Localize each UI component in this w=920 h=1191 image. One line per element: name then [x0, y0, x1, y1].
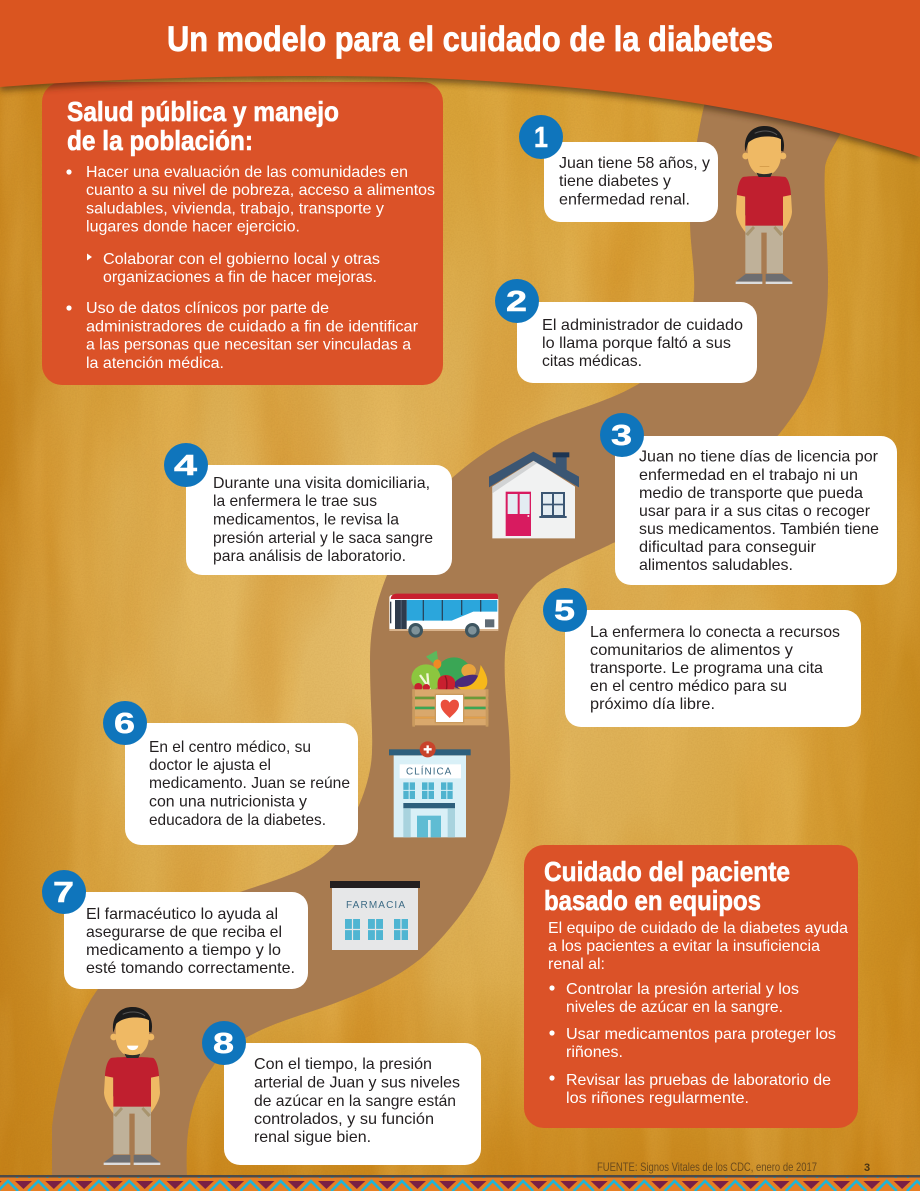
step 4 callout: 4	[174, 450, 197, 482]
figure: Juan, neutral expression	[736, 126, 792, 284]
sub-bullet: local government: Colaborar con el gobierno local y otras	[103, 251, 380, 268]
panel: Cuidado del paciente basado en equipos	[524, 845, 858, 1128]
bullet: blood pressure and sugar	[549, 981, 799, 1016]
source note: FUENTE: Signos Vitales de los CDC, enero de 2017	[597, 1160, 817, 1174]
step 2 callout	[495, 279, 757, 383]
title banner	[0, 0, 920, 161]
icon: pharmacy	[330, 881, 420, 950]
step 8 callout: de azúcar en la sangre están	[254, 1093, 456, 1110]
step 4 callout: presión arterial y le saca sangre	[213, 530, 433, 547]
step 7 callout: esté tomando correctamente.	[86, 960, 295, 977]
step 1 callout	[519, 115, 718, 222]
step 6 callout: medicamento. Juan se reúne	[149, 775, 350, 792]
bullet: community evaluation: Hacer una evaluación de las comunidades en	[86, 164, 408, 181]
bullet: blood pressure and sugar: Controlar la presión arterial y los	[566, 981, 799, 998]
bullet: community evaluation: saludables, vivienda, trabajo, transporte y	[86, 200, 384, 218]
panel: Salud pública y manejo de la población	[42, 82, 443, 385]
intro text: El equipo de cuidado de la diabetes ayuda	[548, 920, 848, 937]
bullet: lab tests	[549, 1072, 831, 1107]
step 7 callout: asegurarse de que reciba el	[86, 924, 282, 941]
step 7 callout: El farmacéutico lo ayuda al	[86, 906, 278, 923]
bullet: clinical data: Uso de datos clínicos por parte de	[86, 300, 329, 317]
step 5 callout: 5	[554, 595, 575, 627]
bullet: clinical data: la atención médica.	[86, 355, 224, 372]
step 7 callout: 7	[53, 877, 74, 909]
step 1 callout: enfermedad renal.	[559, 192, 690, 208]
step 1 callout: tiene diabetes y	[559, 173, 671, 190]
step 6 callout: 6	[114, 708, 135, 740]
icon: bus	[389, 594, 498, 638]
step 3 callout: 3	[611, 420, 632, 452]
step 7 callout: medicamento a tiempo y lo	[86, 942, 281, 959]
panel heading: basado en equipos	[544, 885, 761, 916]
step 1 callout: Juan tiene 58 años, y	[559, 155, 710, 172]
bottom patterned border	[0, 1175, 920, 1191]
bullet: kidney medication: riñones.	[566, 1044, 623, 1061]
step 6 callout: con una nutricionista y	[149, 794, 307, 810]
step 5 callout	[543, 588, 861, 727]
step 8 callout: Con el tiempo, la presión	[254, 1056, 432, 1073]
step 5 callout: transporte. Le programa una cita	[590, 660, 823, 677]
step 8 callout: renal sigue bien.	[254, 1129, 371, 1146]
intro text: a los pacientes a evitar la insuficiencia	[548, 938, 820, 955]
bullet: clinical data: a las personas que necesitan ser vinculadas a	[86, 337, 411, 354]
bullet: blood pressure and sugar: niveles de azúcar en la sangre.	[566, 999, 783, 1016]
sub-bullet: local government: organizaciones a fin de hacer mejoras.	[103, 269, 377, 286]
bullet: kidney medication	[549, 1026, 836, 1061]
bullet: community evaluation	[66, 164, 435, 236]
bullet: kidney medication: Usar medicamentos para proteger los	[566, 1026, 836, 1043]
step 8 callout: 8	[213, 1028, 234, 1060]
panel heading	[544, 856, 790, 916]
step 6 callout: doctor le ajusta el	[149, 757, 271, 774]
step 3 callout	[600, 413, 897, 585]
step 4 callout	[164, 443, 452, 575]
step 2 callout: lo llama porque faltó a sus	[542, 335, 731, 352]
step 1 callout: 1	[534, 122, 548, 154]
step 8 callout: arterial de Juan y sus niveles	[254, 1074, 460, 1092]
step 2 callout: El administrador de cuidado	[542, 317, 743, 334]
icon: crate of vegetables	[411, 651, 488, 727]
panel heading: Salud pública y manejo	[67, 96, 339, 127]
icon: pharmacy: FARMACIA	[346, 900, 405, 911]
bullet: community evaluation: lugares donde hacer ejercicio.	[86, 218, 300, 236]
step 3 callout: dificultad para conseguir	[639, 539, 817, 556]
step 8 callout: controlados, y su función	[254, 1111, 434, 1128]
step 3 callout: usar para ir a sus citas o recoger	[639, 503, 871, 520]
sub-bullet: local government	[87, 251, 380, 286]
step 5 callout: comunitarios de alimentos y	[590, 642, 793, 659]
icon: house	[489, 452, 579, 538]
icon: clinic	[389, 741, 471, 837]
figure: Juan, smiling	[104, 1007, 160, 1165]
bullet: clinical data	[66, 300, 419, 372]
winding road	[52, 90, 845, 1178]
step 2 callout: 2	[506, 286, 527, 318]
step 5 callout: La enfermera lo conecta a recursos	[590, 624, 840, 641]
bullet: lab tests: Revisar las pruebas de laboratorio de	[566, 1072, 831, 1089]
step 6 callout: En el centro médico, su	[149, 739, 311, 756]
panel heading: de la población:	[67, 125, 253, 156]
panel heading	[67, 96, 339, 156]
page number: 3	[864, 1162, 870, 1174]
step 5 callout: en el centro médico para su	[590, 678, 787, 695]
intro text	[548, 920, 848, 973]
title: Un modelo para el cuidado de la diabetes	[167, 20, 773, 59]
step 3 callout: medio de transporte que pueda	[639, 485, 863, 502]
intro text: renal al:	[548, 956, 605, 973]
step 3 callout: enfermedad en el trabajo ni un	[639, 467, 858, 484]
bullet: clinical data: administradores de cuidado a fin de identificar	[86, 318, 419, 336]
step 3 callout: sus medicamentos. También tiene	[639, 521, 879, 538]
bullet: lab tests: los riñones regularmente.	[566, 1090, 749, 1107]
step 4 callout: la enfermera le trae sus	[213, 493, 377, 510]
step 2 callout: citas médicas.	[542, 353, 642, 370]
step 4 callout: medicamentos, le revisa la	[213, 512, 399, 528]
step 5 callout: próximo día libre.	[590, 696, 715, 713]
step 4 callout: para análisis de laboratorio.	[213, 548, 406, 565]
bullet: community evaluation: cuanto a su nivel de pobreza, acceso a alimentos	[86, 182, 435, 199]
step 3 callout: alimentos saludables.	[639, 557, 793, 574]
step 6 callout: educadora de la diabetes.	[149, 812, 326, 829]
icon: clinic: CLÍNICA	[406, 767, 452, 778]
step 8 callout	[202, 1021, 481, 1165]
step 7 callout	[42, 870, 308, 989]
panel heading: Cuidado del paciente	[544, 856, 790, 887]
step 3 callout: Juan no tiene días de licencia por	[639, 449, 879, 466]
step 4 callout: Durante una visita domiciliaria,	[213, 475, 430, 492]
step 6 callout	[103, 701, 358, 845]
